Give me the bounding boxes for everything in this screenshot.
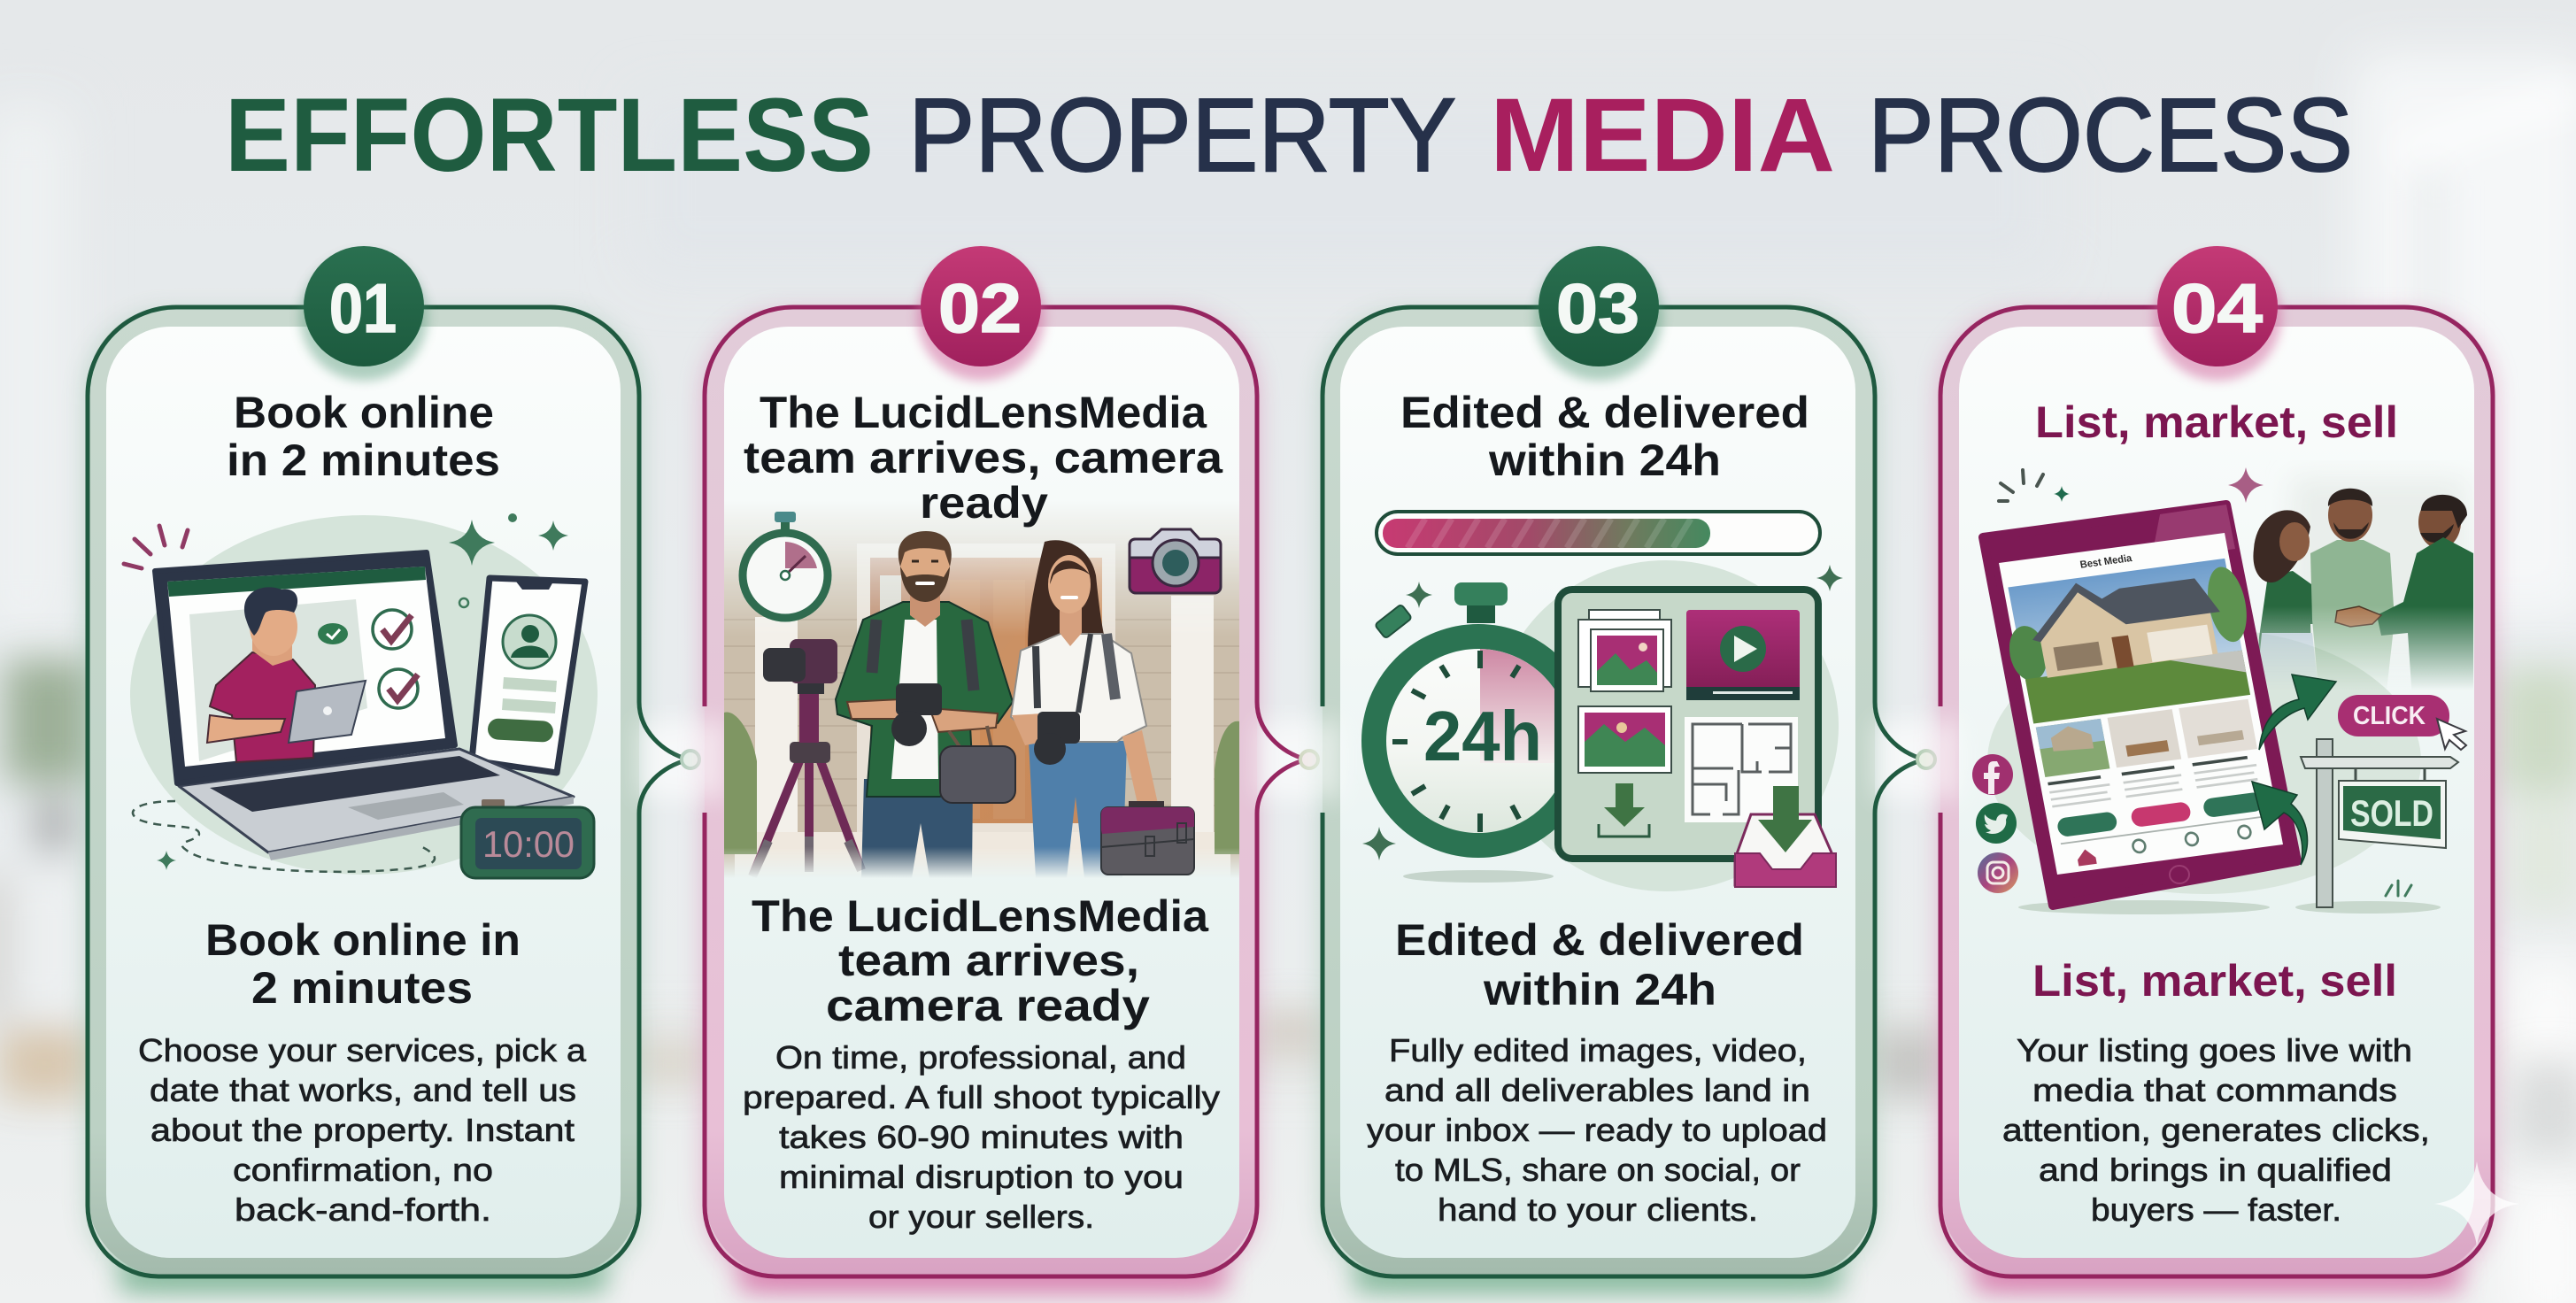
illustration: laptop booking scene [124,513,598,878]
panel: step 2 team arrives [690,246,1318,1293]
arrow: up right [2259,675,2336,750]
icon: facebook [1972,754,2013,795]
top heading: Book online [234,388,494,437]
icon: instagram [1978,852,2018,893]
card frame pink [690,307,1318,1293]
lower heading [205,915,521,1013]
title word: effortless: EFFORTLESS [225,77,874,194]
title [225,77,2353,194]
buyer man [2310,489,2395,699]
lower heading: camera ready [826,981,1150,1030]
top heading: team arrives, camera [744,433,1223,482]
panel: step 3 edited and delivered [1308,246,1935,1293]
inbox tray with arrow [1735,786,1836,887]
lower heading: Edited & delivered [1395,915,1804,965]
agent man [2335,495,2473,699]
tablet screen [1993,532,2291,875]
panel: step 1 book online [88,246,699,1293]
click button [2338,695,2449,736]
description text: date that works, and tell us [150,1072,576,1108]
title word: property: PROPERTY [908,77,1456,194]
lower heading: within 24h [1483,965,1716,1014]
equipment case [1101,804,1194,875]
top heading: ready [920,478,1048,528]
description text [743,1039,1220,1235]
top heading [1400,388,1809,485]
laptop [155,552,574,860]
stopwatch [1374,582,1583,845]
title word: media: MEDIA [1490,77,1835,194]
deliverables panel [1558,590,1818,859]
description text: or your sellers. [868,1199,1094,1235]
description text: and all deliverables land in [1384,1072,1810,1108]
landscape image tile [1578,706,1671,773]
top heading: within 24h [1488,436,1721,485]
step number badge 01: 01 [329,269,397,347]
lower heading: List, market, sell [2032,956,2397,1006]
step number badge 02: 02 [938,269,1022,347]
card frame green [88,307,699,1293]
description text: to MLS, share on social, or [1395,1152,1801,1188]
illustration: 24h stopwatch and media deliverables [1362,560,1843,891]
panel: step 4 list market sell [1926,246,2493,1293]
description text: confirmation, no [233,1152,493,1188]
tripod with camera [752,639,861,876]
description text: attention, generates clicks, [2002,1112,2430,1148]
lower heading [752,891,1209,1030]
description text: back-and-forth. [235,1191,491,1228]
description text: hand to your clients. [1438,1191,1758,1228]
step number badge 04: 04 [2171,269,2263,347]
stopwatch: 24h [1423,697,1542,775]
step number badge 04 [2154,246,2281,381]
step number badge 02 [917,246,1045,381]
alarm clock [461,799,594,878]
progress bar [1377,512,1820,554]
illustration: tablet listing, handshake, sold sign [1972,467,2473,914]
icon: stopwatch [743,512,828,618]
description text: takes 60-90 minutes with [779,1119,1184,1155]
description text: Choose your services, pick a [138,1032,587,1068]
video tile [1686,610,1800,700]
description text: prepared. A full shoot typically [743,1079,1220,1115]
buyer woman [2253,510,2317,676]
click button: CLICK [2353,702,2426,730]
floor plan tile [1685,717,1798,822]
lower heading: 2 minutes [251,963,473,1013]
card frame green [1308,307,1935,1293]
tablet [1983,505,2297,906]
alarm clock: 10:00 [482,823,575,865]
handshake group [2253,478,2473,699]
description text: On time, professional, and [775,1039,1186,1076]
description text: about the property. Instant [150,1112,575,1148]
woman photographer [1011,540,1158,878]
description text [2002,1032,2430,1228]
top heading: in 2 minutes [227,436,500,485]
description text: your inbox — ready to upload [1367,1112,1827,1148]
man photographer [836,531,1015,878]
house facade [724,517,1239,875]
step number badge 03: 03 [1556,269,1639,347]
description text: and brings in qualified [2039,1152,2392,1188]
tablet screen: Best Media [2079,553,2133,571]
description text: buyers — faster. [2091,1191,2341,1228]
phone [472,578,585,773]
card frame pink [1926,307,2493,1293]
description text [1367,1032,1827,1228]
lower heading: The LucidLensMedia [752,891,1209,941]
lower heading: team arrives, [838,936,1139,985]
top heading [744,388,1223,528]
top heading: Edited & delivered [1400,388,1809,437]
decorative corner sparkle [2434,1161,2519,1246]
sold sign: SOLD [2350,792,2433,834]
step number badge 01 [300,246,428,381]
photo stack [1578,610,1671,691]
description text: media that commands [2032,1072,2397,1108]
illustration: photographers at front door [724,487,1239,885]
icon: mouse cursor [2437,719,2466,750]
lower heading [1395,915,1804,1014]
description text: Fully edited images, video, [1389,1032,1807,1068]
top heading: List, market, sell [2035,397,2398,447]
step number badge 03 [1535,246,1662,381]
top heading [227,388,500,485]
download arrow and tray [1599,783,1649,837]
icon: twitter [1976,803,2017,844]
description text: minimal disruption to you [779,1159,1184,1195]
top heading: The LucidLensMedia [760,388,1207,437]
description text [138,1032,587,1228]
title word: process: PROCESS [1868,77,2353,194]
person [207,587,366,762]
lower heading: Book online in [205,915,521,965]
arrow: up left [2252,782,2308,865]
icon: camera [1130,529,1221,593]
sold sign [2301,739,2458,907]
social icons [1972,754,2018,893]
description text: Your listing goes live with [2017,1032,2412,1068]
